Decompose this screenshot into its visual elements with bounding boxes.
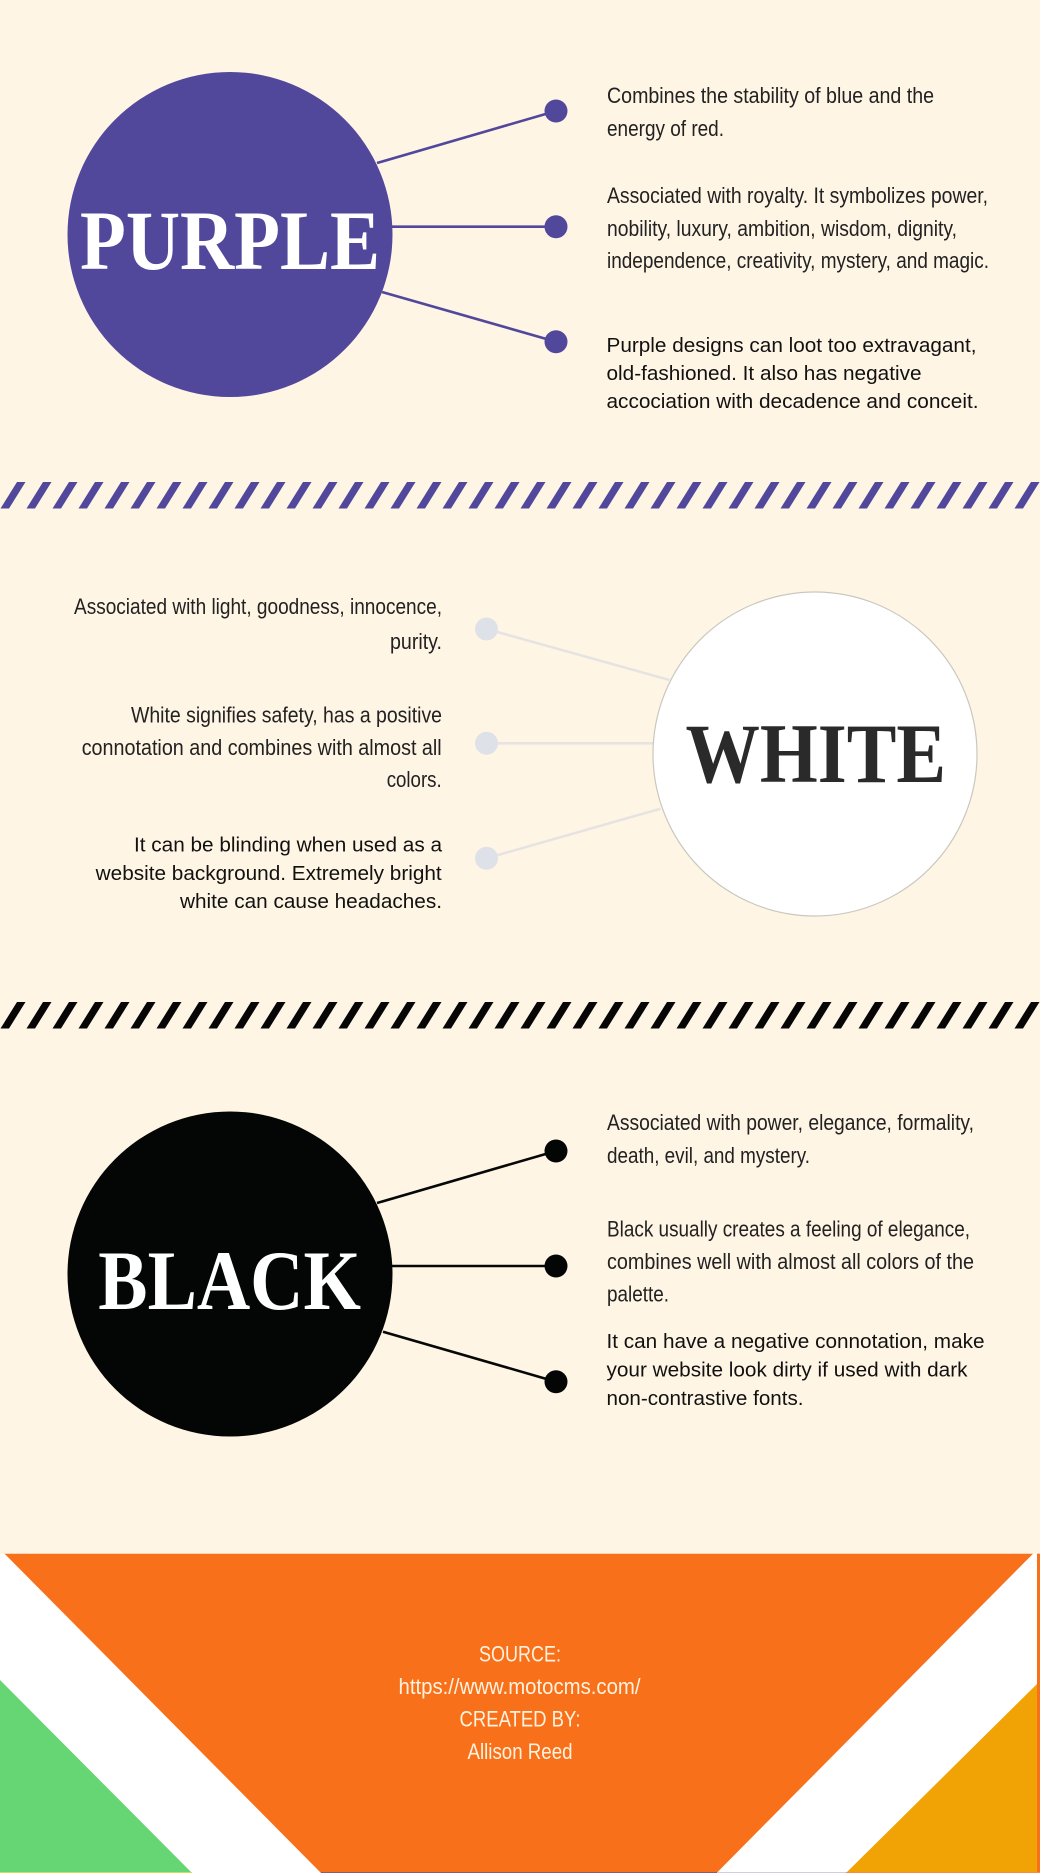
text: white negatives: It can be blinding when used as a [134,835,443,857]
black stripe divider [0,1002,1040,1028]
text: combines well [607,1217,974,1307]
text: blue and red [607,83,934,141]
black circle [68,1112,392,1436]
text: combines well: palette. [607,1282,669,1307]
footer credits [398,1642,641,1764]
text: light and purity: purity. [390,629,442,654]
text: black negatives: non-contrastive fonts. [606,1388,804,1410]
text: royalty: nobility, luxury, ambition, wisdom, dignity, [607,216,957,241]
text: light and purity [74,594,442,654]
footer credits: https://www.motocms.com/ [398,1674,641,1699]
text: combines well: combines well with almost all colors of the [607,1249,974,1274]
text: white negatives: website background. Extremely bright [95,863,442,885]
text: safety: White signifies safety, has a positive [131,703,442,728]
heading: WHITE: WHITE [686,707,946,801]
panel: black [68,1110,984,1436]
text: blue and red: energy of red. [607,116,724,141]
white connector lines and dots [475,618,669,870]
footer bottom edge strip [0,1872,1040,1873]
text: purple negatives: old-fashioned. It also has negative [606,363,922,385]
text: royalty [607,183,989,273]
footer amber triangle [846,1684,1037,1873]
footer credits: SOURCE: [479,1642,561,1667]
text: black negatives: your website look dirty if used with dark [606,1360,969,1382]
black connector lines and dots [377,1140,568,1393]
text: royalty: independence, creativity, mystery, and magic. [607,248,989,273]
text: black negatives [606,1331,984,1410]
text: purple negatives: Purple designs can loot too extravagant, [606,335,976,357]
white circle [653,592,977,916]
panel: footer [0,1554,1040,1873]
footer credits: CREATED BY: [460,1707,580,1732]
footer credits: Allison Reed [468,1739,572,1764]
panel: white [74,592,977,916]
text: black negatives: It can have a negative connotation, make [606,1331,984,1353]
text: purple negatives: accociation with decadence and conceit. [606,391,978,413]
purple stripe divider [0,482,1040,508]
panel: purple [68,72,989,413]
text: blue and red: Combines the stability of blue and the [607,83,934,108]
heading: PURPLE: PURPLE [80,194,380,288]
purple circle [68,72,392,397]
text: safety [82,703,442,792]
text: royalty: Associated with royalty. It symbolizes power, [607,183,988,208]
text: white negatives: white can cause headaches. [179,891,442,913]
text: power and elegance [607,1110,974,1168]
footer right edge strip [1037,1554,1040,1873]
text: power and elegance: Associated with power, elegance, formality, [607,1110,974,1135]
text: safety: connotation and combines with almost all [82,735,442,760]
footer white base [0,1554,1040,1873]
text: light and purity: Associated with light, goodness, innocence, [74,594,442,619]
footer green triangle [0,1680,192,1873]
footer orange trapezoid [5,1554,1033,1873]
purple connector lines and dots [377,100,568,353]
text: white negatives [95,835,443,913]
text: power and elegance: death, evil, and mystery. [607,1143,810,1168]
heading: BLACK: BLACK [98,1234,361,1328]
text: purple negatives [606,335,978,413]
text: combines well: Black usually creates a feeling of elegance, [607,1217,970,1242]
text: safety: colors. [387,767,442,792]
